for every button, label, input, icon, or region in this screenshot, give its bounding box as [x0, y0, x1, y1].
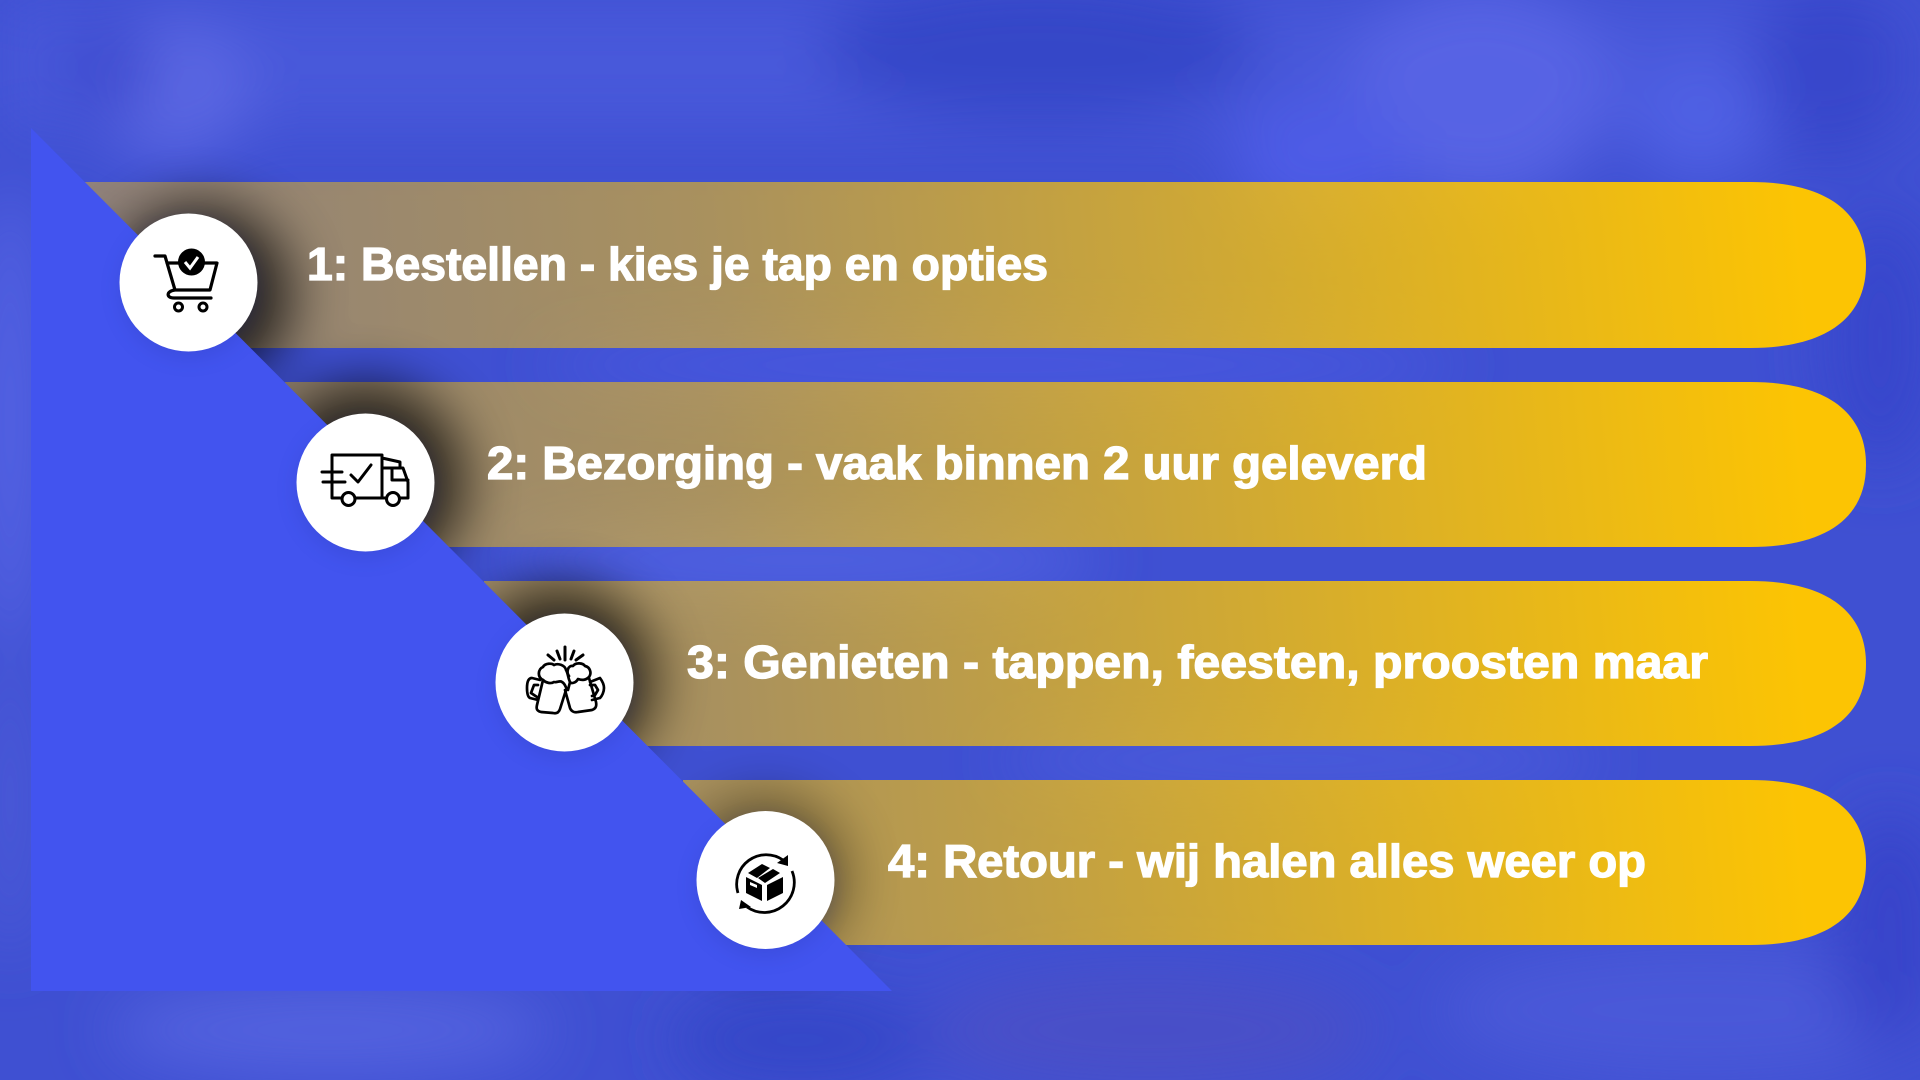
bar 3 — [484, 581, 1866, 746]
step labels — [307, 238, 1708, 887]
icon: clinking beer mugs — [527, 647, 604, 713]
bar 2 — [285, 382, 1866, 547]
white circle 2 — [296, 414, 434, 552]
bar 1 — [85, 182, 1866, 348]
circle shadows on bars — [108, 204, 847, 960]
icon: shopping cart — [155, 248, 217, 311]
step bars — [85, 182, 1866, 945]
step 3: enjoy — [496, 614, 634, 752]
bar 4 — [683, 780, 1866, 945]
step 2: delivery — [296, 414, 434, 552]
label 4: 4: Retour - wij halen alles weer op — [888, 835, 1646, 887]
label 3: 3: Genieten - tappen, feesten, proosten maar — [687, 636, 1708, 688]
white circle 1 — [120, 214, 258, 352]
white circle 3 — [496, 614, 634, 752]
label 1: 1: Bestellen - kies je tap en opties — [307, 238, 1048, 290]
step 1: order — [120, 214, 258, 352]
icon: return box — [737, 855, 794, 912]
blue triangle — [31, 128, 892, 991]
soft shadows on triangle — [120, 220, 834, 956]
step 4: return — [696, 811, 834, 949]
label 2: 2: Bezorging - vaak binnen 2 uur geleverd — [487, 437, 1427, 489]
white circle 4 — [696, 811, 834, 949]
icon: delivery truck — [322, 455, 408, 506]
